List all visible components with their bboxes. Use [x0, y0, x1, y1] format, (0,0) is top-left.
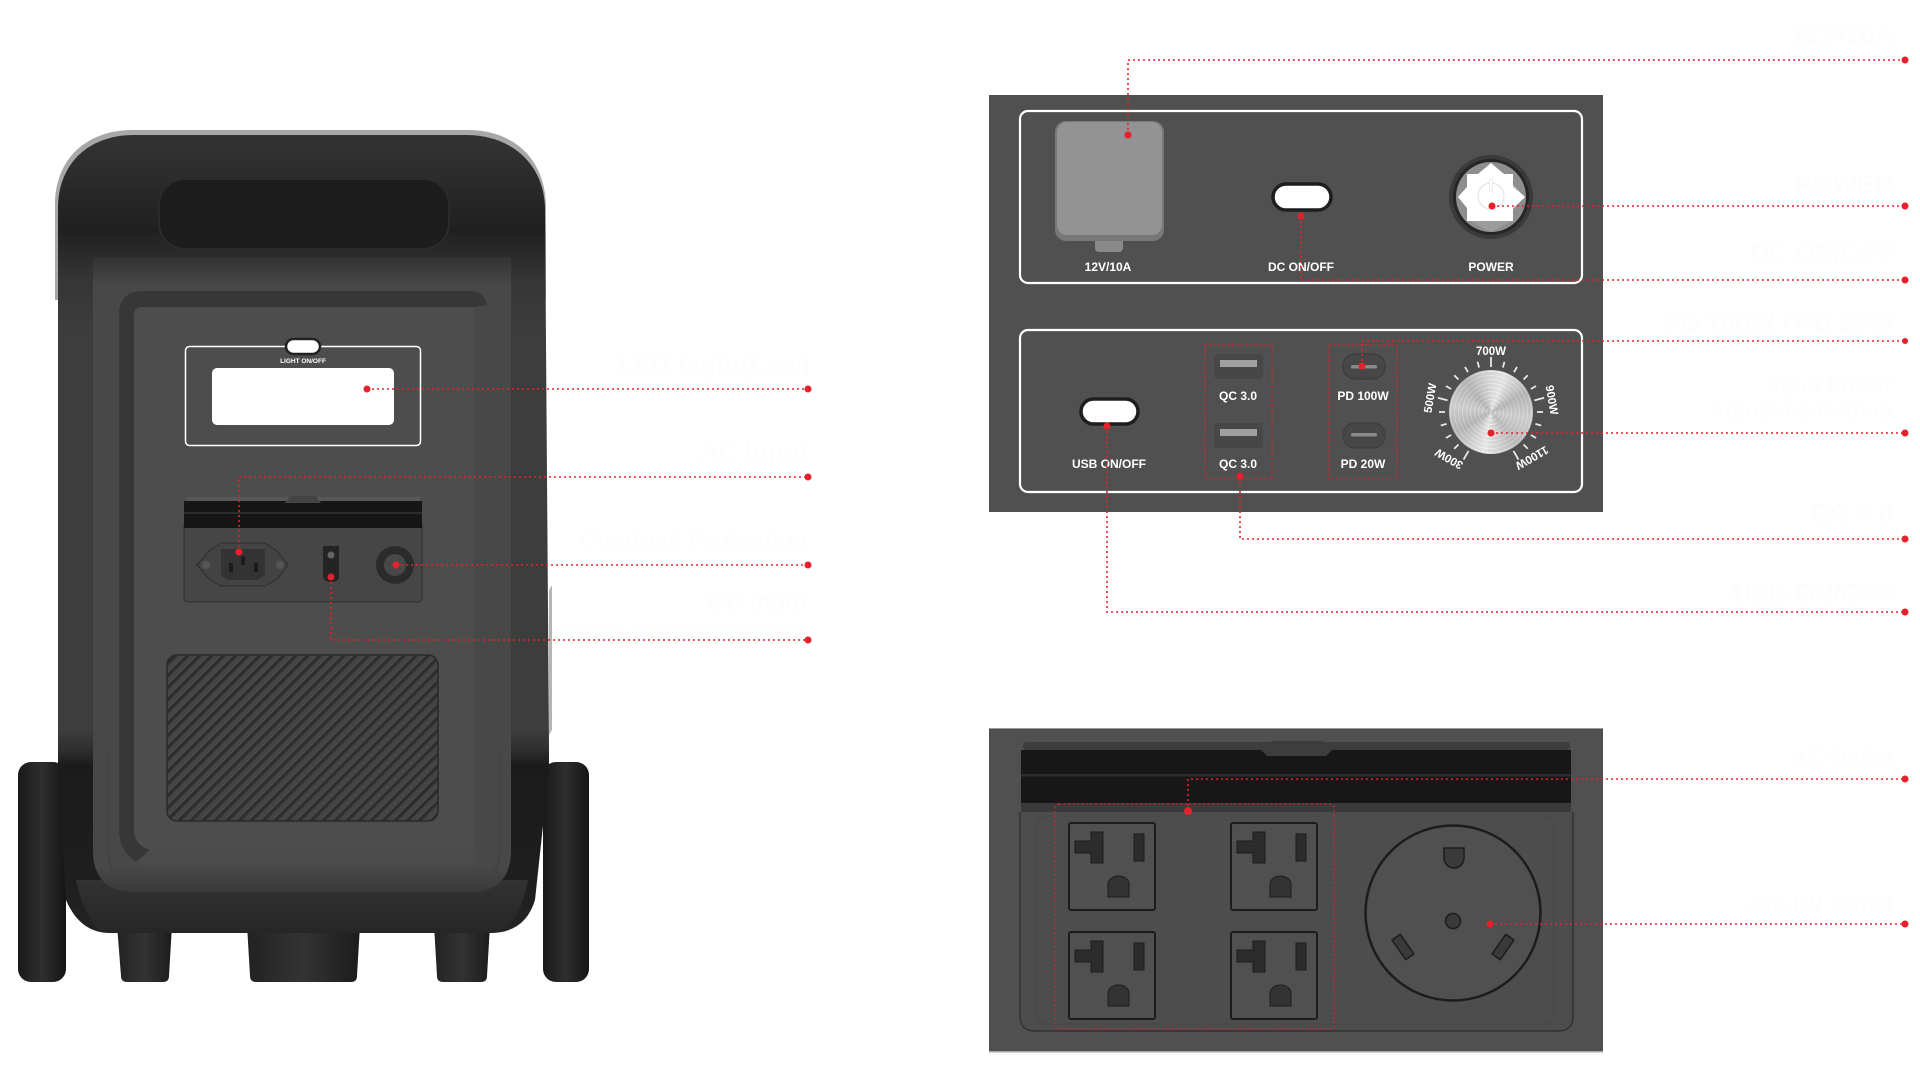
outlet 2	[1231, 823, 1317, 910]
LCD screen	[212, 368, 394, 425]
callout: POWER: POWER	[1795, 169, 1893, 199]
callout: RV Outlet	[1486, 892, 1908, 928]
box: bottom controls	[1020, 330, 1582, 492]
label: QC 3.0 lower: QC 3.0	[1219, 457, 1257, 471]
port plate	[184, 520, 422, 602]
callout: USB ON/OFF: USB ON/OFF	[1733, 578, 1893, 608]
outlet 3	[1069, 932, 1155, 1019]
flap top	[1023, 742, 1570, 750]
bottom lip	[76, 880, 528, 933]
fuse DC jack	[323, 546, 339, 582]
dial ticks	[1438, 357, 1544, 460]
IEC inlet	[197, 543, 288, 586]
callout: Overload Protection	[392, 527, 812, 568]
bottom band	[134, 847, 479, 865]
label: USB ON/OFF: USB ON/OFF	[1072, 457, 1146, 471]
callout: 12V/10A	[1124, 19, 1908, 138]
outlet tray outline	[1020, 812, 1573, 1031]
dial label 900W: 900W	[1542, 384, 1560, 416]
panel background	[989, 728, 1603, 1052]
label: POWER: POWER	[1468, 260, 1514, 274]
dial label 500W: 500W	[1422, 382, 1440, 414]
flap tab	[285, 496, 321, 503]
box: top controls	[1020, 111, 1582, 283]
callout: Input Power Adjustment Knob: Adjustment Knob	[1710, 398, 1893, 423]
dial label 700W: 700W	[1476, 346, 1506, 358]
vent grille	[167, 655, 438, 821]
callout: DC Input	[328, 574, 812, 644]
panel: AC outlets	[989, 728, 1603, 1052]
dashed box: 120V outlets	[1055, 804, 1334, 1029]
dial label 300W: 300W	[1433, 445, 1466, 471]
PD port 20W	[1343, 423, 1385, 448]
callout: PD ports	[1358, 308, 1908, 370]
QC port 2	[1214, 423, 1263, 448]
light label: LIGHT ON/OFF	[280, 358, 326, 365]
foot left	[117, 925, 172, 982]
icon: 12V socket cover	[1055, 121, 1164, 252]
icon: DC switch	[1273, 184, 1331, 210]
callout: QC 3.0	[1236, 472, 1908, 542]
dial label 1100W: 1100W	[1513, 443, 1550, 471]
panel top edge	[989, 728, 1603, 729]
callout: QC 3.0: QC 3.0	[1811, 498, 1893, 528]
inner tray line	[1037, 816, 1554, 1024]
callout: LED Light: LED Light(Low)	[618, 349, 810, 379]
callout: DC ON/OFF: DC ON/OFF	[1750, 238, 1893, 268]
dashed box: PD ports	[1329, 345, 1397, 479]
callout: AC Outlet: AC Outlet	[1792, 745, 1894, 770]
callout: Input Power Adjustment Knob	[1488, 373, 1908, 436]
flap	[184, 501, 422, 528]
flap lip	[1021, 803, 1571, 812]
left wheel	[18, 762, 66, 982]
device: power station rear view	[18, 130, 589, 982]
PD port 100W	[1343, 354, 1385, 379]
icon: power button	[1449, 155, 1533, 239]
black flap	[1021, 750, 1571, 812]
outlet 4	[1231, 932, 1317, 1019]
callout: USB ON/OFF	[1104, 422, 1908, 616]
callout: POWER	[1488, 169, 1908, 210]
callout: Input Power Adjustment Knob: Input Power	[1767, 373, 1893, 398]
dashed box: QC ports	[1205, 345, 1272, 479]
label: PD 100W: PD 100W	[1337, 389, 1389, 403]
icon: metal dial knob	[1449, 370, 1533, 454]
callout: PD ports: PD 100W / PD 20W	[1663, 308, 1893, 338]
label: PD 20W: PD 20W	[1341, 457, 1386, 471]
label: 12V/10A: 12V/10A	[1085, 260, 1132, 274]
callout: AC Input	[236, 436, 812, 556]
front panel outer	[93, 257, 511, 892]
inner panel	[134, 307, 474, 847]
light switch	[286, 339, 320, 354]
callout: DC Input: (Only for solar panel/car charging)	[563, 620, 808, 637]
callout: 12V/10A: 12V/10A	[1792, 19, 1893, 49]
inner recess top and left	[119, 291, 487, 862]
handle recess	[159, 179, 449, 249]
foot centre	[247, 925, 360, 982]
LCD frame	[186, 346, 420, 446]
right wheel	[543, 762, 589, 982]
panel: DC and USB controls	[989, 95, 1603, 512]
callout: RV Outlet: 30A RV Outlet	[1748, 892, 1894, 917]
callout: DC Input: DC Input	[708, 589, 808, 616]
port cover	[184, 496, 422, 602]
icon: USB switch	[1081, 399, 1138, 424]
label: QC 3.0 upper: QC 3.0	[1219, 389, 1257, 403]
callout: AC Outlet	[1184, 745, 1908, 815]
top highlight edge	[55, 130, 546, 760]
label: DC ON/OFF: DC ON/OFF	[1268, 260, 1334, 274]
panel bottom edge	[989, 1051, 1603, 1052]
overload button	[376, 546, 414, 584]
panel seam	[108, 750, 500, 882]
outlet 1	[1069, 823, 1155, 910]
body silhouette	[58, 135, 549, 933]
right side sliver	[549, 585, 552, 735]
foot right	[434, 925, 490, 982]
flap top	[186, 497, 420, 503]
callout: LED Light	[364, 349, 812, 392]
panel background	[989, 95, 1603, 512]
QC port 1	[1214, 354, 1263, 379]
flap seam	[1021, 774, 1571, 776]
callout: Overload Protection: Overload Protection	[579, 527, 808, 554]
callout: AC Input: AC Input	[700, 436, 808, 466]
callout: DC ON/OFF	[1298, 212, 1908, 284]
flap handle	[1261, 741, 1332, 756]
RV round socket	[1366, 826, 1540, 1000]
